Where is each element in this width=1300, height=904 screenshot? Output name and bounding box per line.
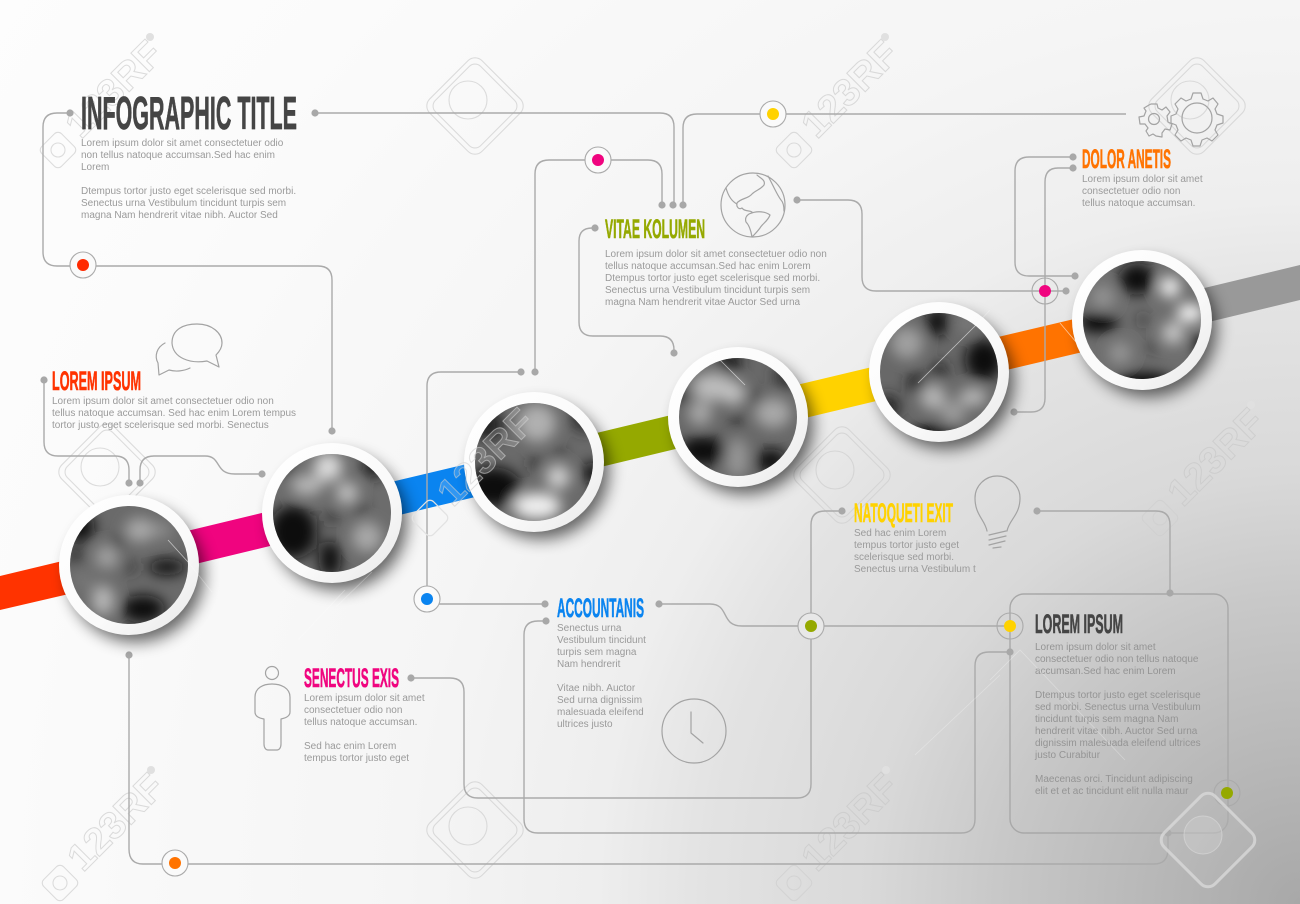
text block: accountanis bbox=[557, 623, 646, 730]
text block: lorem ipsum red: tortor justo eget scelerisque sed morbi. Senectus bbox=[52, 420, 269, 431]
text block: senectus exis bbox=[304, 693, 425, 764]
icon: person bbox=[255, 666, 290, 750]
text block: accountanis: ultrices justo bbox=[557, 719, 613, 730]
photo circle 1 bbox=[59, 495, 204, 642]
infographic canvas: INFOGRAPHIC TITLE bbox=[81, 87, 297, 139]
text block: vitae kolumen: Dtempus tortor justo eget scelerisque sed morbi. bbox=[605, 273, 820, 284]
text block: accountanis: Nam hendrerit bbox=[557, 659, 621, 670]
text block: accountanis: Vestibulum tincidunt bbox=[557, 635, 646, 646]
text block: dolor anetis: consectetuer odio non bbox=[1082, 186, 1180, 197]
text block: lorem ipsum red: tellus natoque accumsan. Sed hac enim Lorem tempus bbox=[52, 408, 296, 419]
colored nodes bbox=[70, 101, 1240, 876]
photo circle 2 bbox=[262, 443, 407, 590]
text block: lorem ipsum red: Lorem ipsum dolor sit amet consectetuer odio non bbox=[52, 396, 274, 407]
watermark pattern: 123RF bbox=[1160, 401, 1273, 514]
text block: vitae kolumen: tellus natoque accumsan.Sed hac enim Lorem bbox=[605, 261, 811, 272]
text block: lorem ipsum dark: sed morbi. Senectus urna Vestibulum bbox=[1035, 702, 1201, 713]
text block: vitae kolumen bbox=[605, 249, 827, 308]
infographic canvas: VITAE KOLUMEN bbox=[605, 214, 705, 244]
text block: lorem ipsum dark: Lorem ipsum dolor sit amet bbox=[1035, 642, 1156, 653]
text block: accountanis: Vitae nibh. Auctor bbox=[557, 683, 636, 694]
connector lines bbox=[43, 113, 1170, 864]
icon: speech bubbles bbox=[156, 324, 222, 375]
text block: lorem ipsum red bbox=[52, 396, 296, 431]
text block: lorem ipsum dark bbox=[1034, 642, 1201, 797]
watermark pattern: 123RF bbox=[794, 766, 907, 879]
text block: senectus exis: tempus tortor justo eget bbox=[304, 753, 409, 764]
text block: senectus exis: Lorem ipsum dolor sit amet bbox=[304, 693, 425, 704]
photo circle 6 bbox=[1072, 250, 1217, 397]
text block: vitae kolumen: Lorem ipsum dolor sit amet consectetuer odio non bbox=[605, 249, 827, 260]
text block: dolor anetis bbox=[1082, 174, 1203, 209]
text block: title intro: Lorem bbox=[81, 162, 109, 173]
infographic canvas: SENECTUS EXIS bbox=[304, 663, 399, 693]
text block: senectus exis: consectetuer odio non bbox=[304, 705, 402, 716]
watermark pattern: 123RF bbox=[58, 33, 171, 146]
text block: title intro: Senectus urna Vestibulum tincidunt turpis sem bbox=[81, 198, 286, 209]
photo circle 5 bbox=[869, 302, 1014, 449]
image artifact highlights on photos bbox=[168, 323, 1076, 562]
text block: senectus exis: Sed hac enim Lorem bbox=[304, 741, 396, 752]
infographic canvas: LOREM IPSUM bbox=[1035, 609, 1123, 639]
text block: lorem ipsum dark: justo Curabitur bbox=[1034, 750, 1101, 761]
text block: title intro bbox=[81, 138, 296, 221]
text block: natoqueti exit: tempus tortor justo eget bbox=[854, 540, 959, 551]
infographic canvas: DOLOR ANETIS bbox=[1082, 144, 1171, 174]
text block: title intro: Lorem ipsum dolor sit amet consectetuer odio bbox=[81, 138, 284, 149]
text block: senectus exis: tellus natoque accumsan. bbox=[304, 717, 417, 728]
watermark pattern: 123RF bbox=[60, 766, 173, 879]
photo circle 3 bbox=[464, 392, 609, 539]
text block: accountanis: Senectus urna bbox=[557, 623, 622, 634]
text block: title intro: magna Nam hendrerit vitae nibh. Auctor Sed bbox=[81, 210, 278, 221]
icon: globe bbox=[721, 173, 785, 237]
text block: title intro: Dtempus tortor justo eget scelerisque sed morbi. bbox=[81, 186, 296, 197]
icon: gears bbox=[1139, 93, 1223, 146]
icon: light bulb bbox=[975, 476, 1020, 548]
watermark over photo 3: 123RF bbox=[430, 401, 543, 514]
text block: accountanis: malesuada eleifend bbox=[557, 707, 644, 718]
text block: natoqueti exit: Senectus urna Vestibulum t bbox=[854, 564, 976, 575]
text block: lorem ipsum dark: dignissim malesuada eleifend ultrices bbox=[1035, 738, 1201, 749]
panel: lorem ipsum box bbox=[1010, 594, 1228, 833]
infographic canvas: LOREM IPSUM bbox=[52, 366, 141, 396]
infographic canvas: ACCOUNTANIS bbox=[557, 593, 644, 623]
icon: clock bbox=[662, 699, 726, 763]
text block: lorem ipsum dark: consectetuer odio non tellus natoque bbox=[1035, 654, 1199, 665]
text block: lorem ipsum dark: tincidunt turpis sem magna Nam bbox=[1035, 714, 1178, 725]
text block: accountanis: Sed urna dignissim bbox=[557, 695, 642, 706]
text block: natoqueti exit bbox=[854, 528, 976, 575]
ribbon timeline bbox=[0, 265, 1300, 610]
text block: lorem ipsum dark: accumsan.Sed hac enim Lorem bbox=[1035, 666, 1176, 677]
text block: lorem ipsum dark: elit et et ac tincidunt elit nulla maur bbox=[1035, 786, 1189, 797]
text block: vitae kolumen: magna Nam hendrerit vitae Auctor Sed urna bbox=[605, 297, 801, 308]
image artifact highlights on background bbox=[188, 310, 1125, 760]
text block: dolor anetis: Lorem ipsum dolor sit amet bbox=[1082, 174, 1203, 185]
watermark over photo 3 bbox=[410, 401, 543, 538]
connector end dots bbox=[40, 109, 1174, 837]
text block: accountanis: turpis sem magna bbox=[557, 647, 637, 658]
text block: natoqueti exit: Sed hac enim Lorem bbox=[854, 528, 946, 539]
text block: vitae kolumen: Senectus urna Vestibulum tincidunt turpis sem bbox=[605, 285, 810, 296]
text block: natoqueti exit: scelerisque sed morbi. bbox=[854, 552, 954, 563]
text block: lorem ipsum dark: Maecenas orci. Tincidunt adipiscing bbox=[1035, 774, 1193, 785]
text block: title intro: non tellus natoque accumsan.Sed hac enim bbox=[81, 150, 275, 161]
infographic canvas: NATOQUETI EXIT bbox=[854, 498, 953, 528]
text block: lorem ipsum dark: Dtempus tortor justo eget scelerisque bbox=[1035, 690, 1201, 701]
photo circle 4 bbox=[668, 347, 813, 494]
text block: lorem ipsum dark: hendrerit vitae nibh. Auctor Sed urna bbox=[1035, 726, 1198, 737]
watermark stamp: bottom right bbox=[1157, 789, 1259, 891]
watermark pattern: 123RF bbox=[794, 33, 907, 146]
text block: dolor anetis: tellus natoque accumsan. bbox=[1082, 198, 1195, 209]
